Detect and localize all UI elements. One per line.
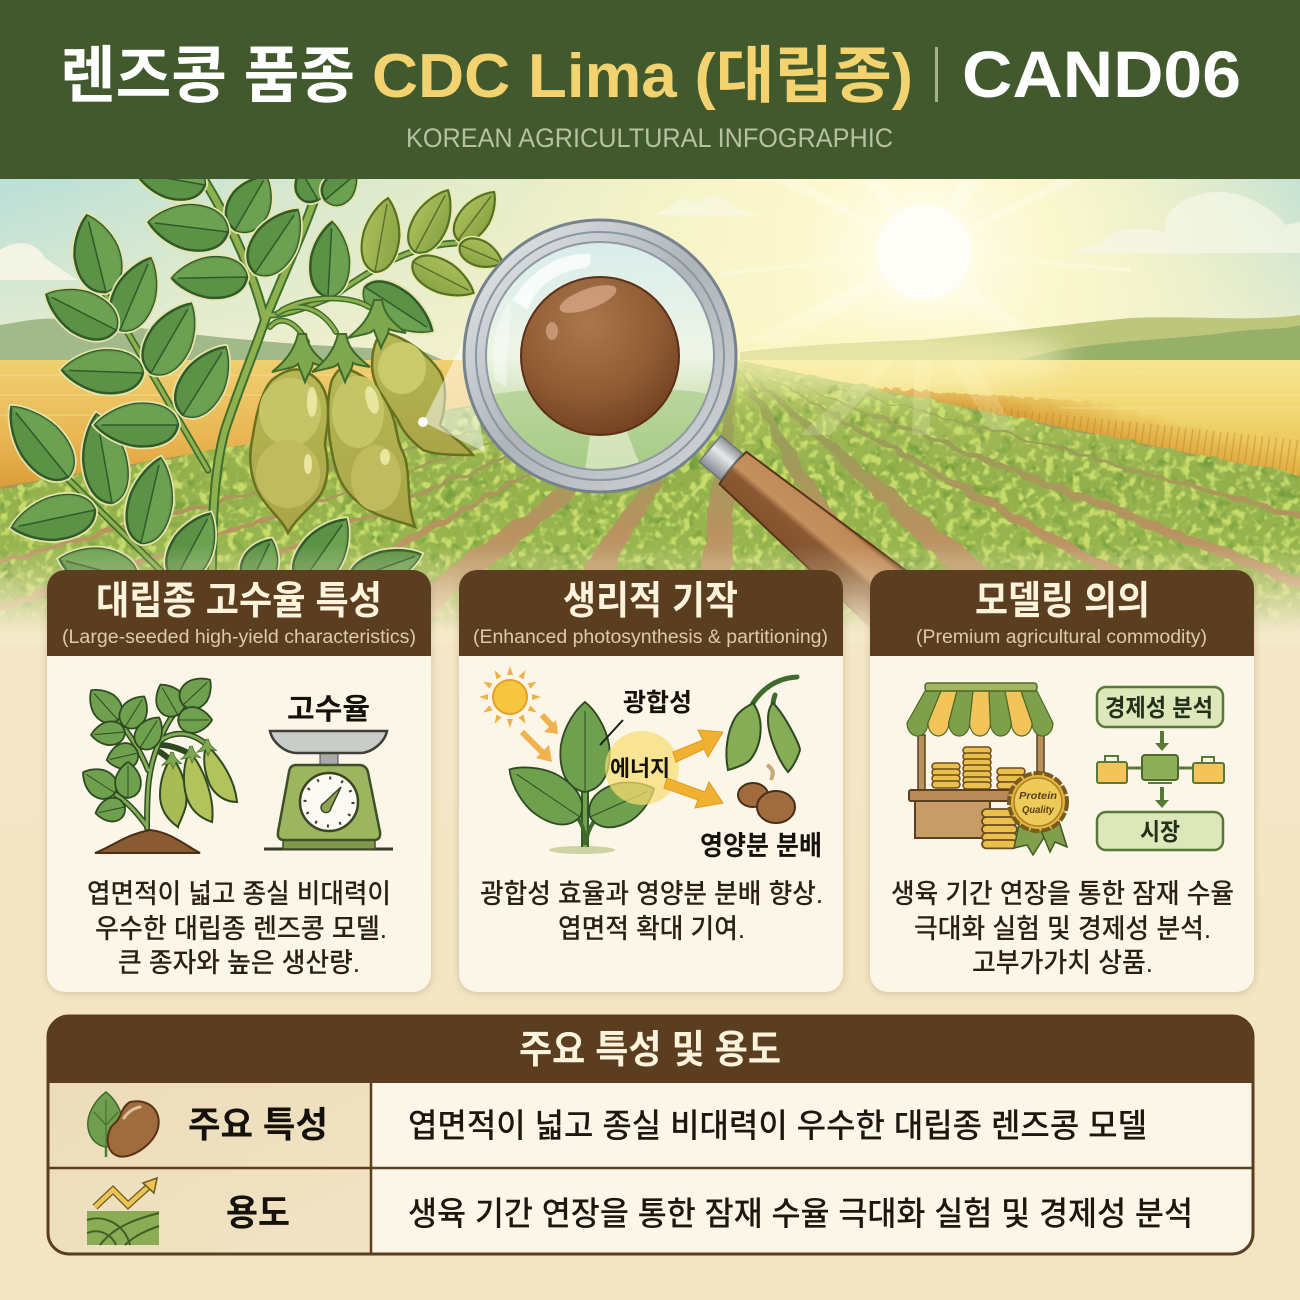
icon: market stall bbox=[907, 683, 1053, 838]
title bbox=[60, 37, 1241, 111]
panel subheading: (Enhanced photosynthesis & partitioning) bbox=[473, 627, 828, 648]
text: uses description: 생육 기간 연장을 통한 잠재 수율 극대화 실험 및 경제성 분석 bbox=[408, 1195, 1193, 1232]
crop rows bbox=[0, 360, 1300, 640]
panel text: 고부가가치 상품. bbox=[972, 948, 1153, 978]
panel text bbox=[480, 879, 823, 944]
icon: pods and seeds bbox=[726, 677, 800, 823]
farm landscape scene bbox=[0, 178, 1300, 640]
lens glare bbox=[512, 254, 591, 310]
text: main traits description: 엽면적이 넓고 종실 비대력이 우수한 대립종 렌즈콩 모델 bbox=[408, 1107, 1147, 1144]
flow diagram: economics analysis to market bbox=[1097, 687, 1224, 850]
wheat fields bbox=[0, 360, 1300, 490]
hills bbox=[0, 315, 1300, 372]
panel: large-seed high-yield traits bbox=[47, 570, 431, 993]
title: CAND06 bbox=[962, 37, 1241, 111]
panel: physiological mechanism bbox=[459, 570, 843, 993]
light rays over the field bbox=[800, 360, 1015, 435]
title: 렌즈콩 품종 bbox=[60, 42, 355, 111]
label: photosynthesis bbox=[600, 689, 692, 745]
label: uses: 용도 bbox=[226, 1192, 290, 1233]
beam from lens to pod bbox=[423, 338, 485, 452]
large lentil plant with pods bbox=[0, 154, 507, 601]
flow diagram: economics analysis to market: 시장 bbox=[1140, 819, 1180, 846]
panel heading: 생리적 기작 bbox=[563, 580, 738, 623]
panel: modeling significance bbox=[870, 570, 1254, 993]
panel text: 엽면적 확대 기여. bbox=[558, 914, 745, 944]
subtitle: KOREAN AGRICULTURAL INFOGRAPHIC bbox=[406, 123, 893, 153]
panel heading: 모델링 의의 bbox=[975, 580, 1150, 623]
arrows to pods and seeds bbox=[664, 730, 723, 808]
seed bbox=[521, 277, 679, 435]
label: nutrient partitioning: 영양분 분배 bbox=[700, 831, 822, 861]
panel text bbox=[87, 879, 391, 978]
leaves bbox=[0, 154, 507, 601]
icon: energy glow bbox=[605, 731, 679, 805]
icon: weighing scale bbox=[264, 731, 393, 849]
table: main traits and uses bbox=[47, 1015, 1254, 1255]
icon: leaf plant bbox=[497, 702, 662, 854]
panel subheading: (Large-seeded high-yield characteristics) bbox=[62, 627, 416, 648]
magnifying glass with lentil seed bbox=[418, 220, 911, 625]
label: high yield: 고수율 bbox=[287, 694, 370, 726]
table heading: 주요 특성 및 용도 bbox=[519, 1029, 781, 1072]
panel subheading: (Premium agricultural commodity) bbox=[916, 627, 1207, 648]
icon: quality medal and coins: Protein bbox=[1019, 791, 1057, 802]
panel text: 극대화 실험 및 경제성 분석. bbox=[914, 914, 1211, 944]
icon: field with rising arrow bbox=[87, 1178, 159, 1245]
scene fade into page background bbox=[0, 545, 1300, 645]
panel text: 우수한 대립종 렌즈콩 모델. bbox=[95, 914, 387, 944]
table left column cells bbox=[47, 1082, 371, 1254]
stems bbox=[66, 178, 456, 578]
header band bbox=[0, 0, 1300, 179]
sky with sun bbox=[0, 178, 1300, 478]
flow diagram: economics analysis to market: 경제성 분석 bbox=[1105, 695, 1213, 722]
label: main traits: 주요 특성 bbox=[188, 1104, 328, 1145]
icon: sun with arrows bbox=[479, 666, 558, 762]
icon: quality medal and coins: Quality bbox=[1022, 805, 1054, 816]
panel text bbox=[891, 879, 1234, 978]
metal ring bbox=[475, 231, 725, 481]
lens bbox=[480, 236, 720, 476]
icon: lentil plant in soil bbox=[76, 670, 237, 853]
panel heading: 대립종 고수율 특성 bbox=[96, 580, 382, 623]
handle bbox=[689, 423, 911, 625]
clouds bbox=[0, 192, 1300, 280]
table header bar bbox=[47, 1015, 1254, 1083]
pods bbox=[250, 298, 473, 533]
panel text: 엽면적이 넓고 종실 비대력이 bbox=[87, 879, 391, 909]
panel text: 큰 종자와 높은 생산량. bbox=[118, 948, 360, 978]
label: photosynthesis: 광합성 bbox=[623, 689, 692, 717]
panel text: 광합성 효율과 영양분 분배 향상. bbox=[480, 879, 823, 909]
label: energy: 에너지 bbox=[610, 756, 670, 781]
title: CDC Lima (대립종) bbox=[372, 42, 913, 111]
panel text: 생육 기간 연장을 통한 잠재 수율 bbox=[891, 879, 1234, 909]
icon: quality medal and coins bbox=[982, 773, 1067, 855]
icon: leaf and bean bbox=[88, 1092, 159, 1157]
